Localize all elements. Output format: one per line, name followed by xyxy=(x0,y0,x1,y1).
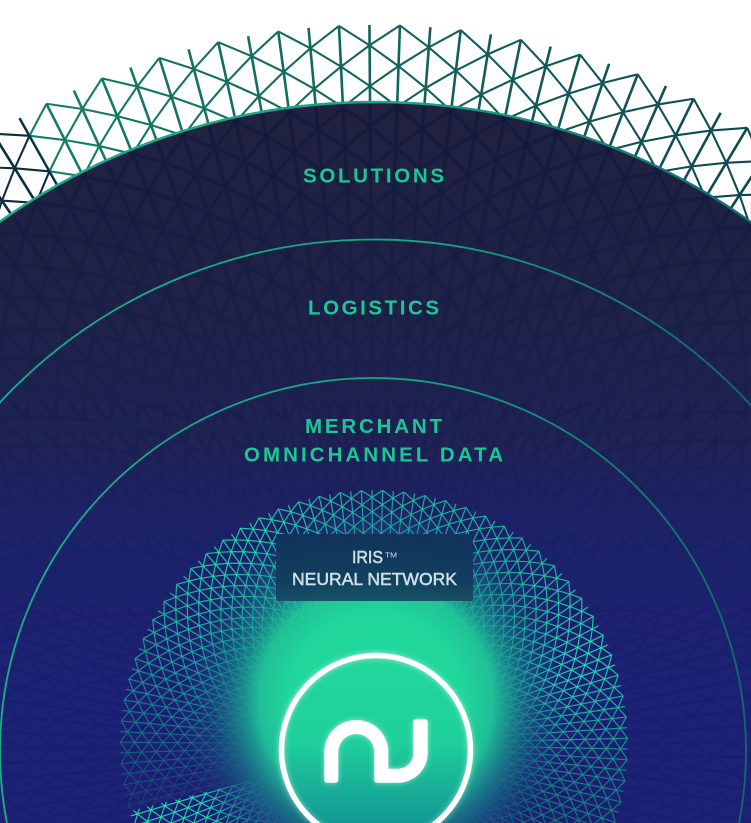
label box: iris neural network xyxy=(276,534,473,601)
central green glow xyxy=(181,505,571,823)
outer triangular mesh dome xyxy=(0,24,751,220)
heading: merchant omnichannel data xyxy=(244,415,503,466)
label box: iris neural network: TM xyxy=(385,550,397,560)
icon: logo mark xyxy=(324,719,428,783)
heading: merchant omnichannel data: OMNICHANNEL DATA xyxy=(244,444,503,466)
label box: iris neural network: IRIS xyxy=(352,547,383,567)
white circle around logo xyxy=(282,656,470,823)
heading: logistics: LOGISTICS xyxy=(308,296,439,320)
inner neural network mesh xyxy=(120,490,628,823)
core disc behind logo xyxy=(281,655,471,823)
mesh shadow inside disc xyxy=(0,104,751,540)
label box: iris neural network: NEURAL NETWORK xyxy=(292,569,457,589)
ring: merchant data boundary xyxy=(0,378,746,823)
ring: logistics boundary xyxy=(0,240,751,823)
heading: solutions: SOLUTIONS xyxy=(303,164,444,188)
heading: merchant omnichannel data: MERCHANT xyxy=(305,415,442,438)
